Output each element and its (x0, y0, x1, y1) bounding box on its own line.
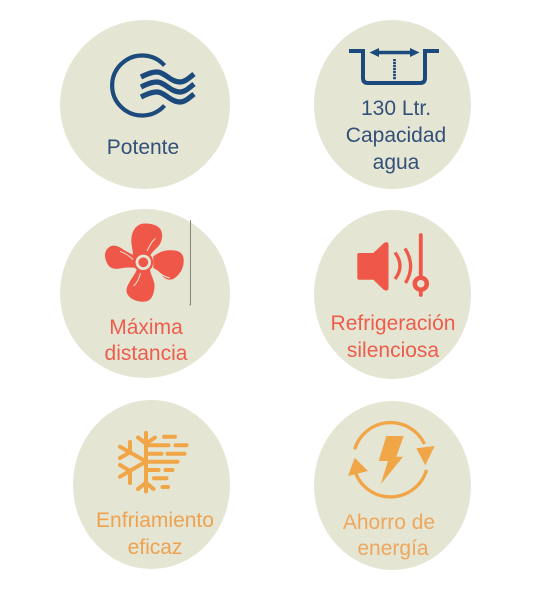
panel: potente (60, 20, 230, 189)
panel: refrigeracion silenciosa (314, 210, 471, 379)
icon: speaker with volume (357, 235, 427, 295)
icon: circle with waves (112, 56, 194, 116)
label: Máxima (109, 316, 183, 339)
label: agua (373, 151, 420, 174)
label (96, 509, 214, 559)
label: Enfriamiento (96, 509, 214, 532)
label: eficaz (128, 536, 182, 559)
label: Capacidad (346, 124, 446, 147)
label: distancia (105, 342, 188, 365)
label: silenciosa (347, 339, 439, 362)
panel: ahorro de energia (314, 401, 471, 570)
label: Potente (107, 136, 179, 159)
label (105, 316, 188, 365)
label: Refrigeración (331, 312, 455, 335)
label: energía (357, 537, 429, 560)
label (346, 97, 446, 174)
panel: capacidad (314, 20, 471, 189)
panel: enfriamiento eficaz (73, 400, 230, 569)
label (343, 511, 435, 560)
label (331, 312, 455, 362)
icon: half snowflake (120, 433, 186, 492)
label: 130 Ltr. (361, 97, 431, 120)
divider line (190, 220, 191, 305)
panel: maxima distancia (60, 209, 230, 378)
icon: energy cycle (348, 423, 435, 497)
icon: fan (105, 224, 184, 302)
icon: tank (349, 48, 439, 83)
label: Ahorro de (343, 511, 435, 534)
